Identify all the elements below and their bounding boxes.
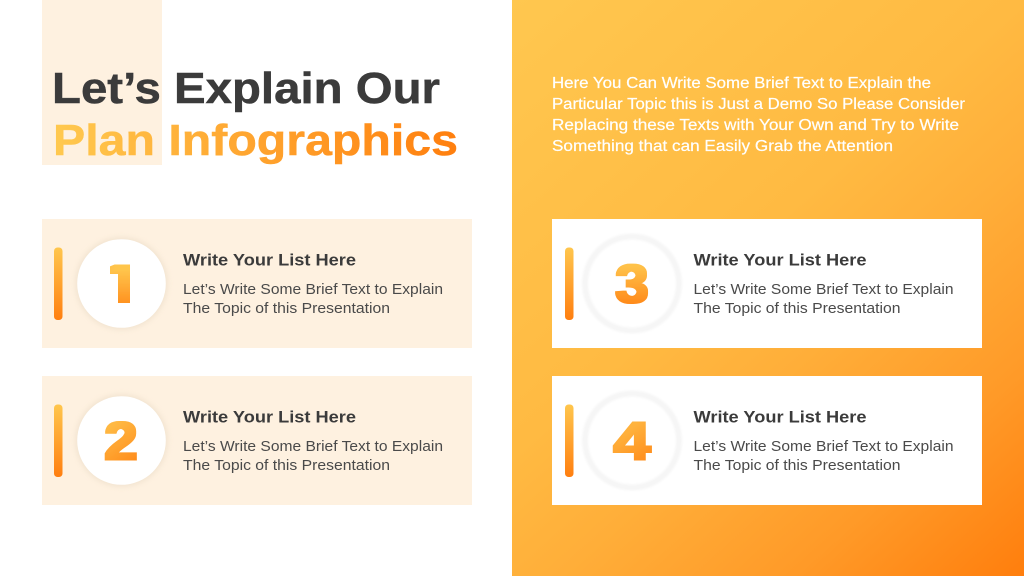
description 1: The Topic of this Presentation	[183, 301, 390, 317]
number badge 4	[585, 394, 679, 488]
number badge 2: 2	[104, 411, 138, 472]
description 2: Let’s Write Some Brief Text to Explain	[183, 439, 443, 455]
panel: list item 3	[552, 219, 982, 348]
number badge 3	[585, 236, 679, 330]
title: Plan Infographics	[53, 116, 458, 165]
panel: list item 2	[42, 376, 472, 505]
description 3	[694, 282, 954, 317]
number badge 3: 3	[615, 254, 649, 315]
decorative title block	[42, 0, 162, 165]
description 3: Let’s Write Some Brief Text to Explain	[694, 282, 954, 298]
description 1	[183, 282, 443, 317]
description 3: The Topic of this Presentation	[694, 301, 900, 317]
title: Let’s Explain Our	[52, 64, 440, 113]
heading 2: Write Your List Here	[183, 408, 356, 426]
number badge 2	[76, 394, 168, 486]
description 2	[183, 439, 443, 474]
description 4: The Topic of this Presentation	[694, 458, 900, 474]
panel: list item 1	[42, 219, 472, 348]
title	[52, 64, 458, 165]
intro text block: Something that can Easily Grab the Attention	[552, 138, 893, 155]
accent bar 3	[565, 248, 574, 320]
panel: list item 4	[552, 376, 982, 505]
description 4	[694, 439, 954, 474]
intro text block: Here You Can Write Some Brief Text to Explain the	[552, 75, 931, 92]
intro text block: Replacing these Texts with Your Own and Try to Write	[552, 117, 959, 134]
accent bar 1	[54, 248, 62, 320]
panel: right orange background	[512, 0, 1024, 576]
heading 1: Write Your List Here	[183, 250, 356, 270]
heading 4: Write Your List Here	[694, 408, 866, 426]
number badge 4: 4	[613, 411, 651, 471]
description 4: Let’s Write Some Brief Text to Explain	[694, 439, 954, 455]
description 1: Let’s Write Some Brief Text to Explain	[183, 282, 443, 298]
number badge 1: 1	[97, 255, 147, 319]
accent bar 4	[565, 404, 574, 477]
number badge 1	[76, 238, 168, 330]
intro text block: Particular Topic this is Just a Demo So Please Consider	[552, 96, 965, 113]
heading 3: Write Your List Here	[694, 250, 866, 270]
accent bar 2	[54, 404, 62, 477]
intro text block	[552, 75, 965, 155]
description 2: The Topic of this Presentation	[183, 458, 390, 474]
